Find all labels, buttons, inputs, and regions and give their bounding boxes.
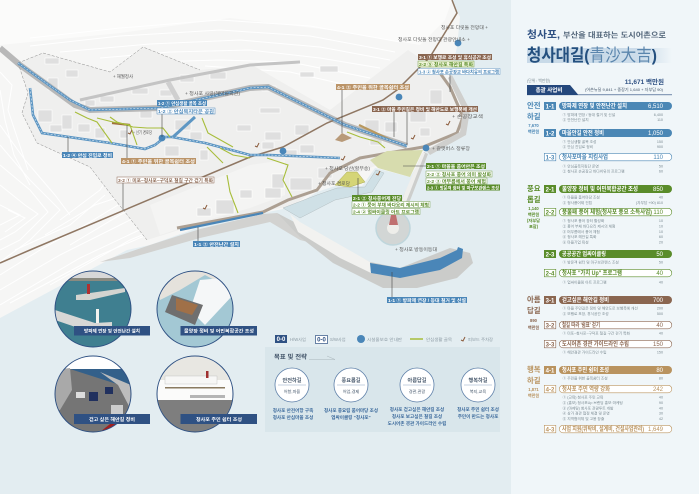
row 1-1: ② 안전난간 설치 [562, 117, 589, 122]
section: 행복하길: 행복 [527, 365, 541, 374]
row 2-4: ① 업싸이클링 아트 프로그램 [562, 280, 607, 284]
land mass [0, 0, 467, 318]
section: 풍요롭길: 롭길 [527, 195, 541, 204]
row 2-4 [544, 269, 672, 284]
goal: 행복하길: 주민이 만드는 청사포 [458, 413, 499, 420]
row 4-2: 90 [659, 401, 663, 405]
row 2-2: 10 [659, 219, 663, 223]
row 4-1: 4-1 [546, 368, 555, 374]
row 1-3 [544, 153, 672, 174]
row 2-2: ① 청사포 풍어 장터 활성화 [562, 218, 605, 223]
legend: H/W사업 [290, 336, 306, 343]
district boundary [18, 47, 200, 240]
map callout labels: 2-2 ③ 머무름에서 풍어 체험 [427, 178, 486, 185]
breakwater with rock armour [277, 213, 473, 288]
row 4-2: 242 [653, 387, 664, 393]
section: 행복하길: 백만원 [528, 392, 539, 399]
legend: 피보드 주차장 [468, 336, 493, 343]
goal: 행복하길 [457, 368, 499, 420]
section: 풍요롭길: 백만원 [528, 211, 539, 218]
row 3-2 [544, 321, 672, 336]
coastal road [177, 73, 463, 228]
map callout labels: 2-2 ⑤ 청사포 해안길 특화 [419, 61, 474, 68]
row 2-2: ③ 머무름에서 풍어 체험 [562, 229, 600, 234]
row 3-3: 3-3 [546, 342, 555, 348]
row 4-2: ④ 상가 경관 협정 체결 및 운영 [562, 410, 610, 416]
place names: + 청사포 경로당 [318, 180, 351, 187]
row 2-3: 50 [656, 252, 664, 258]
goal: 안전하길: 어항,마을 [284, 388, 300, 395]
row 4-1: 80 [659, 376, 663, 380]
row 3-1: ② 보행로 포장, 휴식공간 조성 [562, 311, 609, 316]
section: 풍요롭길 [527, 184, 541, 229]
place names [113, 24, 488, 253]
photo: breakwater extension [55, 271, 150, 347]
row 3-1: ① 마을 주민길은 정비 및 해안도로 보행폭에 개선 [562, 306, 638, 310]
row 1-2: ① 안심생활 골목 조성 [562, 139, 596, 144]
row 2-2: 풍물패 풍어 체험(청사포 풍요 소득사업) [562, 208, 652, 216]
goal: 안전하길: 청사포 안심마을 조성 [273, 414, 313, 421]
panel: budget sidebar [511, 0, 699, 494]
row 1-2 [544, 129, 672, 149]
map callout labels [62, 54, 500, 304]
photo: coastal road [55, 356, 150, 432]
goal: 풍요롭길 [324, 368, 378, 421]
map callout labels: 1-1 ① 방파제 연장 / 등대 철거 및 신설 [388, 297, 466, 304]
place names: 청사포 다릿돌 전망대 관광안내소 + [398, 36, 470, 43]
map callout labels: 1-2 ④ 안심 진입로 정비 [63, 152, 112, 159]
legend: 시설물보호 안내판 [367, 336, 402, 343]
row 1-1 [544, 102, 672, 122]
row 2-2: 10 [659, 230, 663, 234]
place names: 청사포 다릿돌 전망대 + [441, 24, 488, 31]
row 4-3: 4-3 [546, 427, 555, 433]
goals heading: 목표 및 전략 [274, 353, 308, 361]
row 4-2: 40 [659, 406, 663, 410]
total budget: (단위 : 백만원) [527, 78, 551, 83]
row 3-2: 3-2 [546, 323, 555, 329]
blue route [18, 63, 407, 158]
row 2-2: ② 풍어 부채 바다요리 제시의 체험 [562, 224, 615, 228]
east jetty [396, 152, 428, 216]
total budget: 11,671 백만원 [625, 77, 664, 86]
row 3-3: 150 [653, 342, 664, 348]
place names: + 선기 경로당 [133, 129, 153, 136]
row 1-2: 150 [657, 140, 663, 144]
map callout labels: 2-1 ① 마을을 품어안은 조성 [427, 163, 485, 170]
row 1-3: 110 [653, 155, 664, 161]
orange rest strip [359, 125, 397, 143]
section: 행복하길: 하길 [527, 376, 541, 385]
row 1-3: ① 안심골목지킴단 운영 [562, 164, 599, 168]
map callout labels: 2-2 ① 풍어 부채 바다요리 제시의 체험 [353, 201, 429, 208]
row 2-2: ④ 청사포 해안길 특화 [562, 234, 597, 239]
row 1-3: 청사포마을 지킴사업 [562, 153, 608, 161]
row 2-1: 40 [659, 196, 663, 200]
row 4-2: 40 [659, 396, 663, 400]
map callout labels: 3-1 ① 보행로 조성 및 휴식공간 조성 [419, 54, 491, 61]
section: 안전하길 [527, 101, 541, 135]
row 1-1: 방파제 연장 및 안전난간 설치 [562, 102, 627, 110]
title: 청사포, [527, 28, 560, 41]
section: 안전하길: 하길 [527, 112, 541, 121]
secondary road [80, 62, 300, 100]
map callout labels: 2-4 ② 업싸이클링 아트 프로그램 [353, 208, 419, 215]
place names: + 청사포 당산(할부송) [325, 165, 370, 172]
row 4-1: 80 [656, 368, 664, 374]
goals heading [274, 353, 335, 361]
row 4-3: 사업 지원(위탁비, 설계비, 건설사업관리) [562, 425, 644, 433]
info markers [159, 40, 461, 154]
legend: 0-0 [317, 338, 326, 344]
place names: + 손공장교색 [452, 113, 483, 120]
photo: fish market [157, 271, 257, 347]
row 2-4: 40 [659, 280, 663, 284]
map callout labels: 3-1 ② 마을 주민길은 정비 및 해안도로 보행폭에 개선 [373, 106, 477, 113]
map callout labels: 2-2 ② 청사포 풍어 의미 활성화 [427, 171, 492, 178]
green alleys [75, 112, 385, 213]
map callout labels: 2-1 ② 청사풍어제 전당 [353, 195, 402, 202]
map callout labels: 1-1 ② 안전난간 설치 [194, 241, 239, 248]
map callout labels: 1-3 ② 청사포 손공장교 바다치유의 프로그램 [419, 68, 499, 75]
row 4-1: 청사포 주민 쉼터 조성 [562, 366, 609, 374]
row 3-1: 700 [653, 298, 664, 304]
row 4-1: ① 주민을 위한 골목쉼터 조성 [562, 376, 608, 380]
goal: 행복하길: 청사포 주민 쉼터 조성 [457, 406, 499, 413]
yellow building [335, 172, 365, 187]
row 2-4: 청사포 "가치 Up" 프로그램 [562, 269, 622, 277]
section: 풍요롭길: 1,140 [528, 206, 539, 211]
row 1-3: ② 청사포 손공장교 바다치유의 프로그램 [562, 168, 625, 174]
row 1-1: ① 방파제 연장 / 등대 철거 및 신설 [562, 112, 616, 117]
goal: 안전하길: 청사포 안전어항 구축 [273, 407, 314, 414]
map callout labels: 4-1 ② 주민을 위한 골목쉼터 조성 [337, 84, 409, 91]
place names: + 해월정사 [113, 73, 134, 80]
row 1-1: 6,400 [654, 113, 663, 117]
row 2-1: 물양장 정비 및 어민복합공간 조성 [562, 185, 638, 193]
goal: 안전하길: 안전하길 [282, 376, 302, 384]
row 4-2: ① (교육) 청사포 주민 교육 [562, 394, 604, 400]
title: 부산을 대표하는 도시어촌으로 [563, 30, 666, 40]
row 4-3: 1,649 [648, 427, 664, 433]
row 4-1 [544, 366, 672, 380]
row 2-2: 20 [659, 240, 663, 244]
row 3-1: 500 [657, 312, 663, 316]
row 1-3: 60 [659, 170, 663, 174]
row 3-2: 40 [656, 323, 664, 329]
photo: breakwater extension: 방파제 연장 및 안전난간 설치 [84, 328, 140, 334]
village area [18, 47, 463, 240]
row 1-3: 1-3 [546, 155, 555, 161]
row 2-4: 40 [656, 271, 664, 277]
section: 안전하길: 백만원 [528, 128, 539, 135]
section: 아름답길: 답길 [527, 306, 541, 315]
row 2-2: 60 [659, 235, 663, 239]
total budget [527, 77, 672, 95]
row 2-2: 110 [653, 210, 664, 216]
row 2-2 [544, 208, 672, 244]
row 4-2: 30 [659, 412, 663, 416]
goal: 아름답길: 도시어촌 경관 가이드라인 수립 [388, 420, 446, 427]
breakwater rocks west [100, 213, 340, 262]
row 3-1: 3-1 [546, 298, 555, 304]
row 2-2: 2-2 [546, 210, 555, 216]
row 3-2: 40 [659, 332, 663, 336]
row 2-1: (자부담 +90) 810 [636, 200, 663, 205]
row 4-2: ③ (마케팅) 청사포 관광투트 개발 [562, 406, 614, 410]
row 1-2: 1,050 [648, 131, 664, 137]
row 3-3: 도시어촌 경관 가이드라인 수립 [562, 340, 629, 348]
section: 안전하길: 안전 [527, 101, 541, 110]
row 1-3: 50 [659, 164, 663, 168]
total budget: 총괄 사업비 [536, 86, 562, 94]
row 1-2: ② 안심 진입로 정비 [562, 144, 593, 149]
map callout labels: 2-3 ① 방문객 쉼터 및 마구보관렌스 조성 [427, 184, 499, 191]
row 4-2: 청사포 주민 역량 강화 [562, 385, 610, 393]
goal: 아름답길: 경관,관광 [409, 388, 425, 394]
row 2-2: ⑤ 마을기업 육성 [562, 240, 589, 244]
row 1-1: 6,510 [648, 104, 664, 110]
panel: goals and strategy [265, 347, 500, 432]
legend [275, 335, 493, 344]
section: 풍요롭길: 풍요 [527, 184, 541, 193]
safety railing blue [180, 213, 263, 230]
buildings [38, 58, 442, 216]
row 1-2: 1-2 [546, 131, 555, 137]
row 1-2: 900 [657, 145, 663, 149]
section: 풍요롭길: 포함) [529, 223, 539, 229]
legend: 안심생활 골목 [426, 336, 452, 343]
photo: coastal road: 걷고 싶은 해안길 정비 [89, 416, 135, 423]
row 4-2: 42 [659, 417, 663, 421]
goal: 풍요롭길: 어업,경제 [343, 388, 359, 395]
row 2-1: ① 마을을 품어마당 조성 [562, 194, 600, 200]
row 2-3: 50 [659, 260, 663, 264]
row 2-1: 2-1 [546, 187, 555, 193]
row 2-3: 공공공간 업싸이클링 [562, 250, 606, 258]
row 3-1: 200 [657, 306, 663, 310]
row 3-2: ① 미포~청사포~구덕포 철길 구간 걷기 특화 [562, 330, 631, 336]
row 2-2: 10 [659, 224, 663, 228]
row 4-2 [544, 385, 672, 421]
row 2-1 [544, 185, 672, 205]
harbor basin [283, 170, 384, 218]
title [527, 28, 672, 65]
map callout labels: 1-2 ① 안심생활 골목 조성 [158, 100, 206, 107]
goal: 아름답길 [388, 368, 446, 427]
place names: + 청사포 방동이등대 [395, 246, 437, 253]
railway brown line [30, 0, 457, 250]
row 3-1: 걷고싶은 해안길 정비 [562, 296, 609, 304]
tan plaza [335, 133, 352, 142]
goal: 아름답길: 아름답길 [407, 376, 427, 384]
goal: 풍요롭길: 업싸이클링 "청사포" [331, 414, 371, 421]
goal: 행복하길: 행복하길 [468, 376, 488, 384]
main road [0, 48, 407, 146]
section: 아름답길: 890 [530, 318, 538, 323]
goal: 풍요롭길: 청사포 풍요림 품어마당 조성 [324, 407, 378, 414]
goal: 행복하길: 복지,교육 [470, 388, 486, 395]
leader lines [68, 74, 450, 297]
row 2-3: 2-3 [546, 252, 555, 258]
row 1-2: 마을안길 안전 정비 [562, 129, 604, 137]
map callout labels: 1-2 ② 안심복지타운 공원 [158, 108, 214, 115]
row 2-4: 2-4 [546, 271, 555, 277]
row 3-1 [544, 296, 672, 316]
goal: 아름답길: 청사포 걷고싶은 해안길 조성 [390, 406, 444, 413]
legend: 0-0 [277, 337, 286, 343]
row 1-1: 1-1 [546, 104, 555, 110]
place names: + 갈맷버스 정류장 [432, 145, 471, 152]
row 3-3: ① 해안경관 가이드라인 수립 [562, 350, 607, 354]
place names: + 청사포 사랑(해마을회관) [185, 90, 241, 97]
row 4-2: ② (홍보) 청사포Up 브랜딩 홍보·마케팅 [562, 400, 623, 405]
lighthouse island [376, 211, 410, 245]
goal: 아름답길: 청사포 보고싶은 철길 조성 [392, 413, 442, 420]
row 2-3: ① 방문객 쉼터 및 마구보관렌스 조성 [562, 260, 619, 264]
section: 행복하길 [527, 365, 541, 399]
coastal revetment [426, 75, 470, 155]
row 2-1: ② 청사풍어제 건립 [562, 200, 592, 205]
row 1-1: 110 [657, 118, 663, 122]
photo: resident shelter: 청사포 주민 쉼터 조성 [196, 416, 242, 423]
goal: 안전하길 [273, 368, 314, 421]
row 2-3 [544, 250, 672, 264]
section: 안전하길: 7,670 [528, 123, 539, 128]
green community area [370, 150, 423, 177]
row 2-1: 850 [653, 187, 664, 193]
goal: 풍요롭길: 풍요롭길 [341, 376, 361, 384]
row 3-3: 150 [657, 350, 663, 354]
row 4-2: ⑤ 지역협의체 및 고용 창출 [562, 416, 605, 421]
title: 청사대길(青沙大吉) [527, 46, 657, 65]
section: 아름답길: 아름 [527, 295, 541, 304]
map: aerial site plan [0, 0, 500, 318]
section: 아름답길 [527, 295, 541, 331]
row 3-2: 철길 따라 '쉼표' 걷기 [562, 321, 600, 329]
section: 행복하길: 1,871 [528, 387, 539, 392]
photo: resident shelter [157, 356, 257, 432]
map callout labels: 4-1 ① 주민을 위한 골목쉼터 조성 [122, 158, 195, 165]
total budget: (어촌뉴딜 9,841 + 중장기 1,640 + 자부담 90) [585, 86, 664, 92]
parking markers [128, 121, 450, 209]
map callout labels: 3-2 ① 미포~청사포~구덕포 철길 구간 걷기 특화 [118, 177, 214, 184]
legend: S/W사업 [330, 336, 346, 343]
photo: fish market: 물양장 정비 및 어민복합공간 조성 [184, 328, 254, 334]
section: 풍요롭길: (자부담 [527, 217, 540, 224]
row 4-2: 4-2 [546, 387, 555, 393]
row 3-3 [544, 340, 672, 354]
section: 아름답길: 백만원 [528, 324, 539, 331]
